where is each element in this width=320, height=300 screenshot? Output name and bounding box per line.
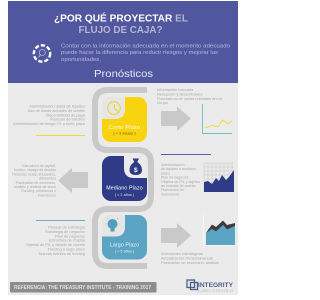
icon: logo mark [187,280,198,290]
text: mediano plazo left: Estructura de capital, [22,164,56,168]
chart: teal area [204,214,235,246]
card: Largo Plazo: ( < 5 años ) [115,250,135,254]
text: largo plazo left: Planear de estrategia [48,224,86,230]
text: mediano plazo left: análisis y análisis de stock [14,185,56,189]
icon: magnifier [34,45,50,62]
text: mediano plazo left: fondeo, repago de deudas [14,168,56,172]
arrow: right 1 [161,106,191,131]
panel: background [8,83,238,295]
text: mediano plazo right [161,163,200,196]
intro text: puede hacer la diferencia para reducir riesgos y mejorar las [61,50,218,56]
text: mediano plazo left [12,164,56,197]
text: largo plazo left: Funding a largo plazo [48,246,85,252]
card: Corto Plazo: Corto Plazo [109,125,140,131]
logo: INTEGRITY [198,282,233,289]
reference bar [10,282,156,292]
arrow: right 2 [161,223,191,248]
arrow: left [58,168,88,193]
intro text: Contar con la información adecuada en el momento adecuado [61,44,230,50]
text: corto plazo left: Administración diaria de liquidez [29,104,85,108]
card: Largo Plazo: Largo Plazo [110,242,139,248]
text: mediano plazo right: inversiones [161,192,179,196]
text: largo plazo left: Estructura de Capital [49,238,85,243]
title line 2: FLUJO DE CAJA? [78,25,162,36]
card: Mediano Plazo: Mediano Plazo [106,186,143,192]
intro text: oportunidades. [61,57,101,63]
icon: clock [108,102,120,114]
text: mediano plazo right: Administración [161,163,185,167]
text: corto plazo right: Recepción y desembolsos [157,92,202,96]
text: largo plazo left: Plan de negocios [55,233,85,238]
text: corto plazo right [157,87,222,105]
text: mediano plazo right: Planeación de [161,188,184,192]
text: largo plazo right: Inversiones estratégicas [161,251,203,256]
text: mediano plazo right: de estados de cuenta [161,184,195,188]
intro text [61,44,230,63]
logo: Latin America [198,288,233,294]
icon: light bulb [105,218,120,232]
chart: area grid [204,163,234,192]
connector path [95,90,151,266]
text: corto plazo left: Administración de riesgo FX a corto plazo [13,121,85,126]
card: Mediano Plazo: ( < 2 años ) [115,193,135,197]
text: mediano plazo left: Funding, prestamos e [21,189,56,193]
text: corto plazo left: Disponibilidad de pago [46,112,85,118]
text: mediano plazo left: Finanzas netas, impuestos, [12,172,56,176]
text: mediano plazo right: plazo [161,171,170,175]
card: Largo Plazo [102,215,147,260]
text: corto plazo right: Información bancaria [157,87,194,92]
text: corto plazo left: Uso de líneas actuales de crédito [27,108,85,113]
divider: yellow [36,135,85,136]
card: Corto Plazo: ( < 3 meses ) [113,132,136,136]
text: mediano plazo left: Planeación de escenario, [16,181,56,185]
text: corto plazo left: Posición de efectivo [50,116,85,122]
text: largo plazo left [25,224,86,256]
text: largo plazo right [161,251,219,265]
text: corto plazo right: Pronósticos de varias unidades en un [157,96,222,101]
text: mediano plazo right: Plan de negocios [161,176,189,180]
text: mediano plazo left: Inversiones [38,193,56,197]
chart: line [202,104,232,134]
card: Mediano Plazo [102,156,147,201]
text: mediano plazo right: Objetos de P/L y objetos [161,180,200,184]
icon: money bag: $ [134,167,138,174]
heading: Pronósticos: Pronósticos [94,69,153,80]
text: largo plazo left: Objetos de P/L y estado de cuenta [25,242,86,247]
text: largo plazo left: Estrategia de negocios [45,229,85,234]
text: largo plazo right: Actualización Trimestral/anual [161,256,213,260]
text: corto plazo right: Grupo [157,100,168,105]
card: Corto Plazo [102,97,147,142]
reference bar: REFERENCIA: THE TREASURY INSTITUTE - TRAINING 2017 [14,285,151,291]
text: largo plazo left: Nuevas fuentes de funding [39,251,85,256]
panel: header [8,1,238,83]
divider: blue [161,154,211,155]
divider: teal [36,220,85,221]
text: mediano plazo left: dividendos [39,177,56,181]
logo [187,280,233,294]
title: ¿POR QUÉ PROYECTAR EL [54,12,188,24]
text: corto plazo left [13,104,85,126]
text: largo plazo right: Planeación de escenario, análisis [161,260,219,265]
text: mediano plazo right: de liquidez a mediano [161,167,196,171]
